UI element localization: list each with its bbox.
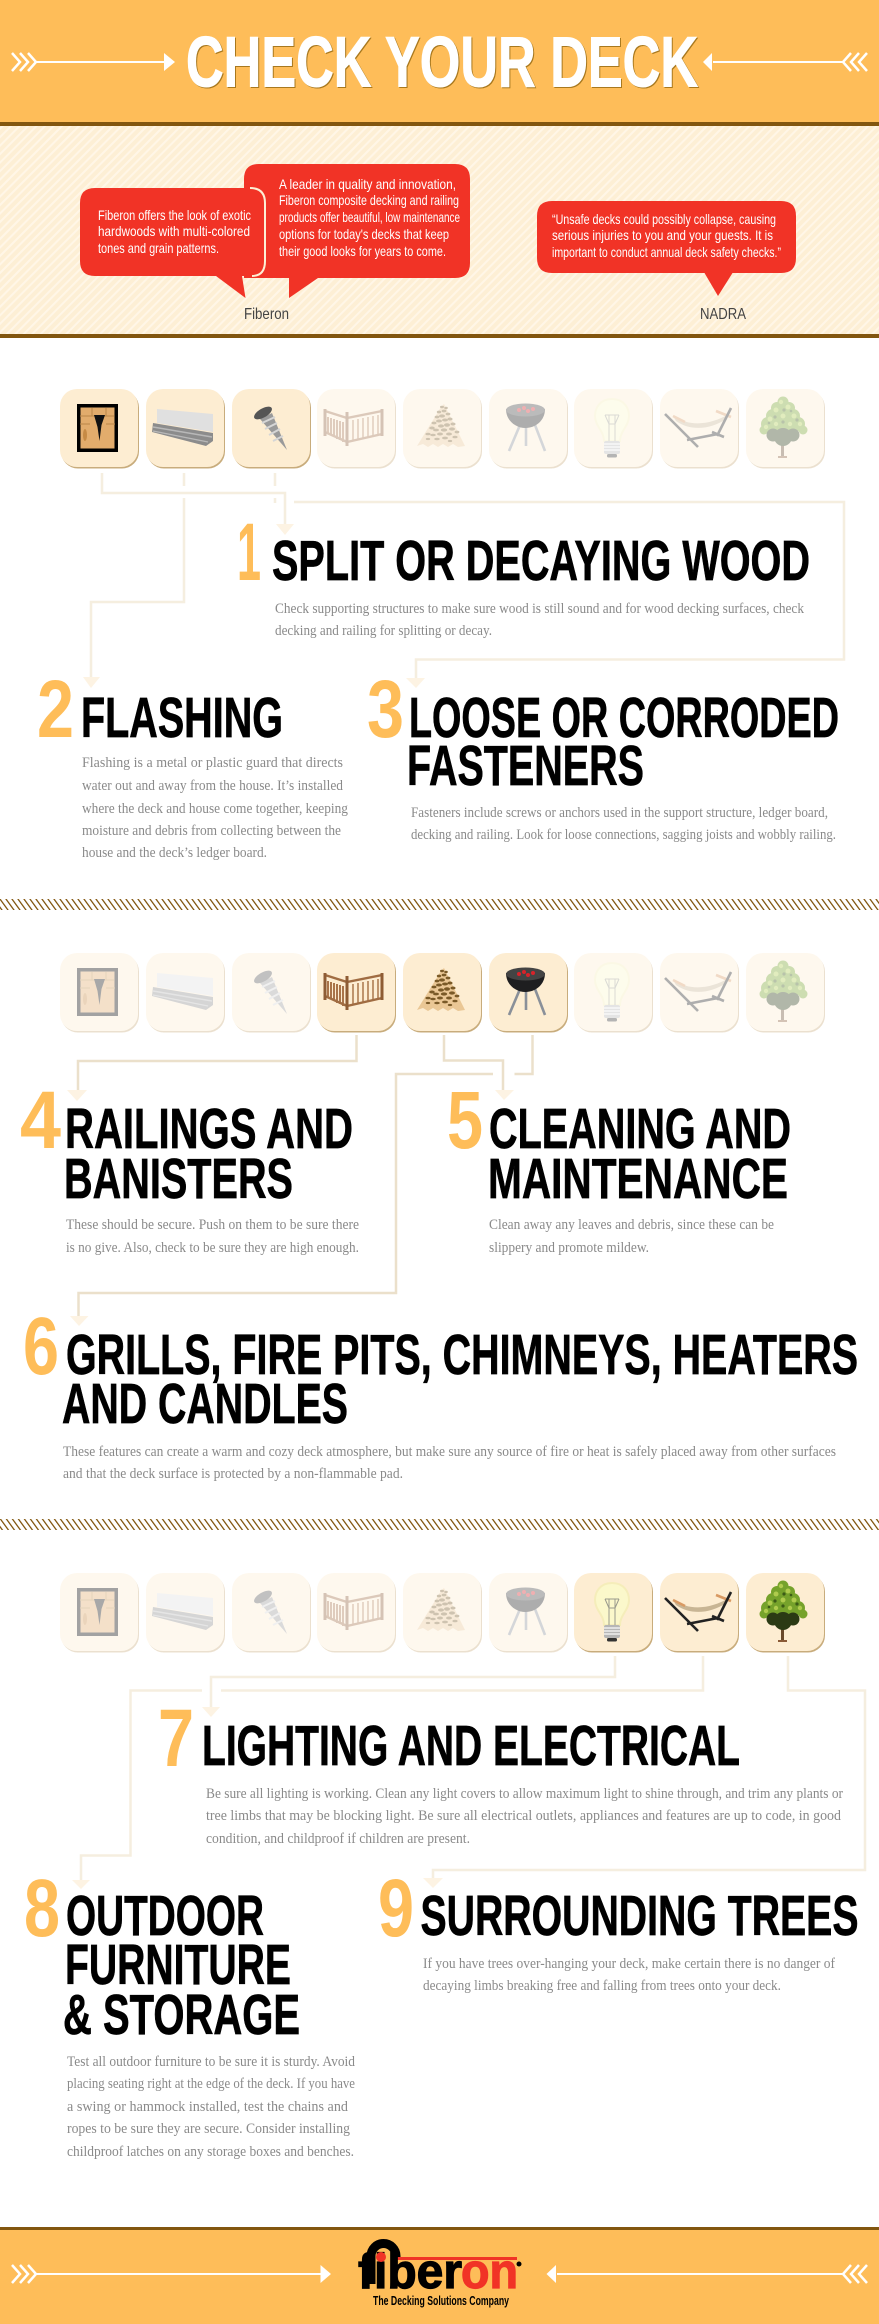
body 7: tree limbs that may be blocking light. Be sure all electrical outlets, appliances and features are up to code, in good [206, 1808, 841, 1824]
speech bubble: Fiberon hardwoods [80, 188, 265, 298]
speech bubble: NADRA [537, 201, 796, 296]
number 9: 9 [378, 1863, 414, 1954]
heading 4: RAILINGS AND [65, 1097, 353, 1161]
icon: flashing faded [146, 953, 225, 1032]
speech bubble: Fiberon hardwoods: tones and grain patterns. [98, 240, 219, 256]
body 3 [411, 805, 836, 843]
icon row: section 1 [60, 389, 825, 468]
logo: fiberon: on [461, 2245, 518, 2299]
arrow: to item 2 [83, 473, 184, 688]
icon: tree faded [746, 389, 825, 468]
label: NADRA: NADRA [700, 306, 746, 323]
section: item 8 [24, 1863, 355, 2160]
heading 8: OUTDOOR [66, 1884, 264, 1948]
body 1: Check supporting structures to make sure wood is still sound and for wood decking surfaces, check [275, 601, 804, 617]
body 4: These should be secure. Push on them to be sure there [66, 1217, 359, 1233]
header banner [0, 0, 879, 126]
arrow: header right [703, 53, 867, 71]
heading 4 [64, 1097, 353, 1211]
icon row: section 2 [60, 953, 825, 1032]
body 8: ropes to be sure they are secure. Consider installing [67, 2121, 350, 2137]
body 8: Test all outdoor furniture to be sure it is sturdy. Avoid [67, 2054, 355, 2070]
heading 8: & STORAGE [63, 1983, 300, 2047]
icon: split wood faded [60, 1573, 139, 1652]
logo: fiberon: fiber [358, 2245, 462, 2299]
body 7: condition, and childproof if children are present. [206, 1831, 470, 1847]
icon: hammock faded [660, 389, 739, 468]
heading 2: FLASHING [81, 686, 283, 750]
arrow: to item 4 [67, 1035, 356, 1101]
icon: railing faded [317, 1573, 396, 1652]
heading 8: FURNITURE [65, 1933, 291, 1997]
arrow: footer right [546, 2265, 867, 2283]
icon: flashing faded [146, 1573, 225, 1652]
section: item 4 [20, 1075, 359, 1256]
body 8: placing seating right at the edge of the deck. If you have [67, 2076, 355, 2092]
speech bubble: Fiberon quality: Fiberon composite decking and railing [279, 192, 459, 208]
number 1: 1 [237, 507, 261, 598]
icon: tree faded [746, 953, 825, 1032]
icon: railing faded [317, 389, 396, 468]
speech bubble: NADRA: serious injuries to you and your guests. It is [552, 227, 773, 243]
icon: grill faded [489, 389, 568, 468]
number 4: 4 [20, 1075, 61, 1166]
body 2: where the deck and house come together, keeping [82, 801, 348, 817]
body 6 [63, 1444, 836, 1482]
body 5: Clean away any leaves and debris, since these can be [489, 1217, 774, 1233]
section: item 9 [378, 1863, 858, 1994]
body 4: is no give. Also, check to be sure they are high enough. [66, 1240, 359, 1256]
icon: grill faded [489, 1573, 568, 1652]
body 8: a swing or hammock installed, test the chains and [67, 2099, 348, 2115]
speech bubble: Fiberon quality [244, 164, 470, 298]
speech bubble: Fiberon quality: their good looks for years to come. [279, 243, 446, 259]
icon: grill [489, 953, 568, 1032]
heading 6 [62, 1323, 858, 1436]
icon: hammock faded [660, 953, 739, 1032]
section: item 7 [158, 1693, 843, 1847]
speech bubble: Fiberon quality: A leader in quality and innovation, [279, 176, 456, 192]
icon: bulb faded [574, 953, 653, 1032]
panel: quotes band [0, 126, 879, 338]
body 2 [82, 755, 348, 861]
icon: leaves faded [403, 389, 482, 468]
icon: screw faded [232, 1573, 311, 1652]
icon: bulb faded [574, 389, 653, 468]
body 2: moisture and debris from collecting between the [82, 823, 341, 839]
body 6: and that the deck surface is protected by a non-flammable pad. [63, 1466, 403, 1482]
body 9: If you have trees over-hanging your deck, make certain there is no danger of [423, 1956, 835, 1972]
number 3: 3 [367, 664, 404, 755]
body 1 [275, 601, 804, 639]
body 9: decaying limbs breaking free and falling from trees onto your deck. [423, 1978, 781, 1994]
section: item 3 [367, 664, 839, 843]
body 5 [489, 1217, 774, 1256]
footer banner [0, 2227, 879, 2324]
icon: bulb [574, 1573, 653, 1652]
number 5: 5 [447, 1075, 483, 1166]
speech bubble: NADRA: important to conduct annual deck safety checks.” [552, 244, 781, 260]
body 3: Fasteners include screws or anchors used in the support structure, ledger board, [411, 805, 828, 821]
arrow: to item 8 [72, 1656, 703, 1889]
icon: split wood faded [60, 953, 139, 1032]
body 8 [67, 2054, 355, 2160]
speech bubble: Fiberon quality: options for today's decks that keep [279, 226, 449, 242]
number 7: 7 [158, 1693, 194, 1784]
icon: railing [317, 953, 396, 1032]
icon: hammock [660, 1573, 739, 1652]
speech bubble: Fiberon hardwoods: Fiberon offers the look of exotic [98, 207, 251, 223]
heading 5 [488, 1097, 791, 1211]
icon: split wood [60, 389, 139, 468]
logo: fiberon: The Decking Solutions Company [373, 2294, 509, 2308]
arrow: to item 9 [423, 1656, 865, 1888]
icon: screw [232, 389, 311, 468]
icon: leaves [403, 953, 482, 1032]
body 4 [66, 1217, 359, 1256]
number 8: 8 [24, 1863, 60, 1954]
arrow: to item 3 [275, 473, 844, 688]
section: item 2 [37, 664, 348, 861]
label: Fiberon: Fiberon [244, 306, 289, 323]
number 2: 2 [37, 664, 74, 755]
heading 4: BANISTERS [64, 1147, 293, 1211]
body 7 [206, 1786, 843, 1847]
icon: leaves faded [403, 1573, 482, 1652]
speech bubble: Fiberon hardwoods: hardwoods with multi-colored [98, 223, 250, 239]
number 6: 6 [23, 1301, 59, 1392]
arrow: to item 6 [70, 1035, 532, 1326]
icon row: section 3 [60, 1573, 825, 1652]
body 2: house and the deck’s ledger board. [82, 845, 267, 861]
heading 3 [407, 686, 839, 798]
arrow: to item 1 [102, 473, 294, 535]
heading 8 [63, 1884, 300, 2047]
heading 3: FASTENERS [407, 734, 644, 798]
body 8: childproof latches on any storage boxes and benches. [67, 2144, 354, 2160]
body 5: slippery and promote mildew. [489, 1240, 649, 1256]
speech bubble: Fiberon quality: products offer beautiful, low maintenance [279, 209, 460, 225]
arrow: to item 7 [202, 1656, 615, 1717]
section: item 1 [237, 507, 810, 639]
section: item 6 [23, 1301, 858, 1482]
icon: flashing [146, 389, 225, 468]
speech bubble: NADRA: “Unsafe decks could possibly collapse, causing [552, 211, 776, 227]
arrow: to item 5 [444, 1035, 514, 1100]
logo: fiberon [358, 2244, 522, 2308]
body 2: Flashing is a metal or plastic guard that directs [82, 755, 343, 771]
heading 6: AND CANDLES [62, 1372, 348, 1436]
icon: tree [746, 1573, 825, 1652]
body 2: water out and away from the house. It’s installed [82, 778, 343, 794]
body 1: decking and railing for splitting or decay. [275, 623, 492, 639]
arrow: footer left [12, 2265, 331, 2283]
title: CHECK YOUR DECK [186, 24, 698, 102]
body 9 [423, 1956, 835, 1994]
icon: screw faded [232, 953, 311, 1032]
arrow: header left [12, 53, 175, 71]
section: item 5 [447, 1075, 791, 1256]
